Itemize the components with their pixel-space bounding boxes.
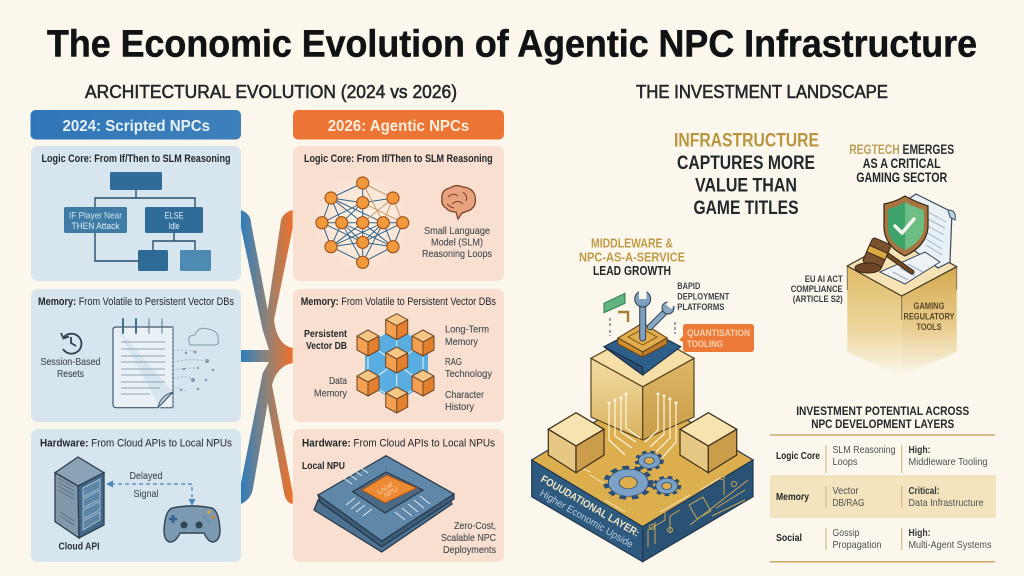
- row: memory: DB/RAG: [832, 497, 864, 509]
- labels: memory features: Memory: [445, 336, 479, 348]
- labels: data memory: [314, 375, 348, 400]
- callout: regtech emerges: GAMING SECTOR: [856, 169, 947, 185]
- row: social: Multi-Agent Systems: [908, 539, 992, 551]
- label: zero-cost deployments: Scalable NPC: [441, 532, 496, 544]
- pedestal: [847, 236, 957, 376]
- panel: 2024 memory: Memory: From Volatile to Persistent Vector DBs: [38, 296, 234, 308]
- label: zero-cost deployments: Zero-Cost,: [454, 520, 496, 532]
- icon: history clock: [61, 333, 81, 354]
- labels: memory features: History: [445, 401, 475, 413]
- upward data lines: [608, 392, 678, 458]
- label: local npu: Local NPU: [302, 460, 345, 472]
- header: 2026 agentic NPCs: 2026: Agentic NPCs: [328, 118, 469, 135]
- icon: shield: [884, 196, 928, 256]
- labels: memory features: [445, 324, 493, 413]
- icon: cloud server: [55, 457, 104, 538]
- table heading: [796, 404, 969, 431]
- panel: 2024 logic core: [31, 146, 241, 281]
- diagram: decision tree: [64, 172, 211, 271]
- gears: [608, 453, 678, 496]
- row: social: High:: [908, 527, 930, 539]
- labels: memory features: RAG: [445, 356, 462, 368]
- diagram: decision tree: IF Player Near: [69, 210, 122, 220]
- label: zero-cost deployments: Deployments: [443, 544, 496, 556]
- label: persistent vector db: Persistent: [304, 328, 347, 340]
- label: eu ai act compliance: (ARTICLE S2): [793, 294, 843, 304]
- scroll document: [880, 194, 955, 284]
- table: investment potential: [770, 404, 996, 562]
- arrow: connector between columns: [241, 210, 293, 504]
- label: rapid deployment platforms: [677, 281, 730, 312]
- row: memory: Vector: [832, 485, 859, 497]
- label: gaming regulatory tools: REGULATORY: [904, 312, 954, 322]
- label: delayed signal: Delayed: [130, 470, 163, 482]
- header: 2026 agentic NPCs: [293, 110, 504, 140]
- label: cloud api: Cloud API: [58, 540, 100, 552]
- wrench tools: [604, 289, 676, 338]
- table heading: NPC DEVELOPMENT LAYERS: [811, 417, 954, 431]
- panel: 2024 hardware: [31, 429, 241, 562]
- callout: middleware lead growth: [579, 235, 685, 278]
- row: social: Social: [776, 532, 802, 544]
- row: logic core: [776, 444, 988, 468]
- diagram: decision tree: Idle: [168, 221, 180, 231]
- arrow: delayed signal: [106, 480, 196, 506]
- label: persistent vector db: Vector DB: [306, 340, 347, 352]
- panel: 2026 hardware: Hardware: From Cloud APIs to Local NPUs: [302, 438, 495, 450]
- side cubes: [548, 413, 737, 473]
- header: 2024 scripted NPCs: [30, 110, 241, 140]
- label: small language model: Model (SLM): [431, 236, 483, 248]
- callout: middleware lead growth: LEAD GROWTH: [593, 263, 671, 278]
- callout: infrastructure captures more value: CAPTURES MORE: [677, 153, 815, 174]
- panel: 2024 logic core: Logic Core: From If/Then to SLM Reasoning: [42, 153, 230, 165]
- panel: 2024 hardware: Hardware: From Cloud APIs to Local NPUs: [40, 438, 232, 450]
- foundation base: [532, 393, 753, 562]
- row: social: Propagation: [832, 539, 882, 551]
- row: logic core: High:: [908, 444, 930, 456]
- labels: data memory: Data: [329, 375, 347, 387]
- diagram: decision tree: ELSE: [164, 210, 184, 220]
- row: memory: Critical:: [908, 485, 940, 497]
- diagram: vector db cubes: [357, 314, 434, 413]
- label: small language model: Reasoning Loops: [422, 248, 492, 260]
- icon: NPU chip: Local: [376, 481, 395, 496]
- callout: infrastructure captures more value: [674, 131, 819, 219]
- label: small language model: [422, 225, 492, 260]
- diagram: decision tree: THEN Attack: [72, 221, 120, 231]
- icon: brain: [442, 186, 475, 219]
- diagram: regtech pedestal: [847, 194, 957, 376]
- row: memory: [776, 485, 984, 509]
- callout: middleware lead growth: NPC-AS-A-SERVICE: [579, 250, 685, 265]
- callout: quantisation tooling: TOOLING: [687, 339, 723, 349]
- callout: infrastructure captures more value: INFRASTRUCTURE: [674, 131, 819, 152]
- label: rapid deployment platforms: DEPLOYMENT: [677, 292, 730, 302]
- label: foundational layer: Higher Economic Upside: [538, 488, 635, 551]
- table heading: INVESTMENT POTENTIAL ACROSS: [796, 404, 969, 418]
- icon: NPU chip: [314, 456, 454, 552]
- row: memory: Memory: [776, 491, 809, 503]
- label: eu ai act compliance: COMPLIANCE: [791, 284, 843, 294]
- heading: investment landscape: THE INVESTMENT LANDSCAPE: [636, 82, 888, 102]
- panel: 2026 logic core: [293, 146, 504, 281]
- callout: middleware lead growth: MIDDLEWARE &: [591, 235, 673, 250]
- icon: gavel: [855, 237, 912, 273]
- heading: architectural evolution: ARCHITECTURAL EVOLUTION (2024 vs 2026): [85, 82, 457, 102]
- label: gaming regulatory tools: TOOLS: [916, 322, 942, 332]
- icon: notebook dissolving: [113, 319, 218, 408]
- row: logic core: SLM Reasoning: [832, 444, 896, 456]
- icon: game controller: [164, 506, 220, 542]
- diagram: neural network: [312, 172, 412, 272]
- label: delayed signal: [130, 470, 163, 500]
- label: session-based resets: [40, 356, 101, 380]
- label: rapid deployment platforms: PLATFORMS: [677, 302, 724, 312]
- labels: memory features: Character: [445, 389, 484, 401]
- labels: memory features: Long-Term: [445, 324, 489, 336]
- label: eu ai act compliance: [791, 274, 843, 304]
- callout: infrastructure captures more value: GAME TITLES: [694, 198, 798, 219]
- panel: 2024 memory: [31, 289, 241, 422]
- label: eu ai act compliance: EU AI ACT: [805, 274, 843, 284]
- label: rapid deployment platforms: BAPID: [677, 281, 701, 291]
- title: The Economic Evolution of Agentic NPC Infrastructure: [47, 24, 977, 66]
- panel: 2026 hardware: [293, 429, 504, 562]
- labels: memory features: Technology: [445, 368, 493, 380]
- callout: regtech emerges: [849, 141, 954, 185]
- panel: 2026 logic core: Logic Core: From If/Then to SLM Reasoning: [304, 153, 493, 165]
- label: session-based resets: Resets: [57, 368, 84, 380]
- label: gaming regulatory tools: [904, 301, 954, 332]
- callout: quantisation tooling: QUANTISATION: [687, 328, 750, 338]
- label: foundational layer: FOUUDATIONAL LAYER:: [538, 473, 641, 540]
- label: delayed signal: Signal: [134, 488, 158, 500]
- header: 2024 scripted NPCs: 2024: Scripted NPCs: [62, 118, 210, 135]
- callout: quantisation tooling: [679, 324, 754, 352]
- label: session-based resets: Session-Based: [40, 356, 101, 368]
- row: logic core: Middleware Tooling: [908, 456, 988, 468]
- row: logic core: Loops: [832, 456, 858, 468]
- main tower: [591, 330, 694, 440]
- label: persistent vector db: [304, 328, 347, 352]
- icon: NPU chip: NPU: [383, 486, 399, 500]
- panel: 2026 memory: Memory: From Volatile to Persistent Vector DBs: [301, 296, 496, 308]
- callout: regtech emerges: AS A CRITICAL: [863, 155, 941, 171]
- row: social: [776, 527, 992, 551]
- callout: infrastructure captures more value: VALUE THAN: [695, 176, 797, 197]
- panel: 2026 memory: [293, 289, 504, 422]
- diagram: foundational layer isometric stack: [532, 289, 753, 562]
- row: memory: Data Infrastructure: [908, 497, 984, 509]
- row: social: Gossip: [832, 527, 860, 539]
- row: logic core: Logic Core: [776, 450, 820, 462]
- label: small language model: Small Language: [424, 225, 490, 237]
- label: zero-cost deployments: [441, 520, 496, 556]
- top tier with tools: [604, 323, 681, 375]
- callout: regtech emerges: REGTECH EMERGES: [849, 141, 954, 157]
- label: gaming regulatory tools: GAMING: [914, 301, 944, 311]
- circuit traces: [575, 455, 748, 547]
- labels: data memory: Memory: [314, 388, 348, 400]
